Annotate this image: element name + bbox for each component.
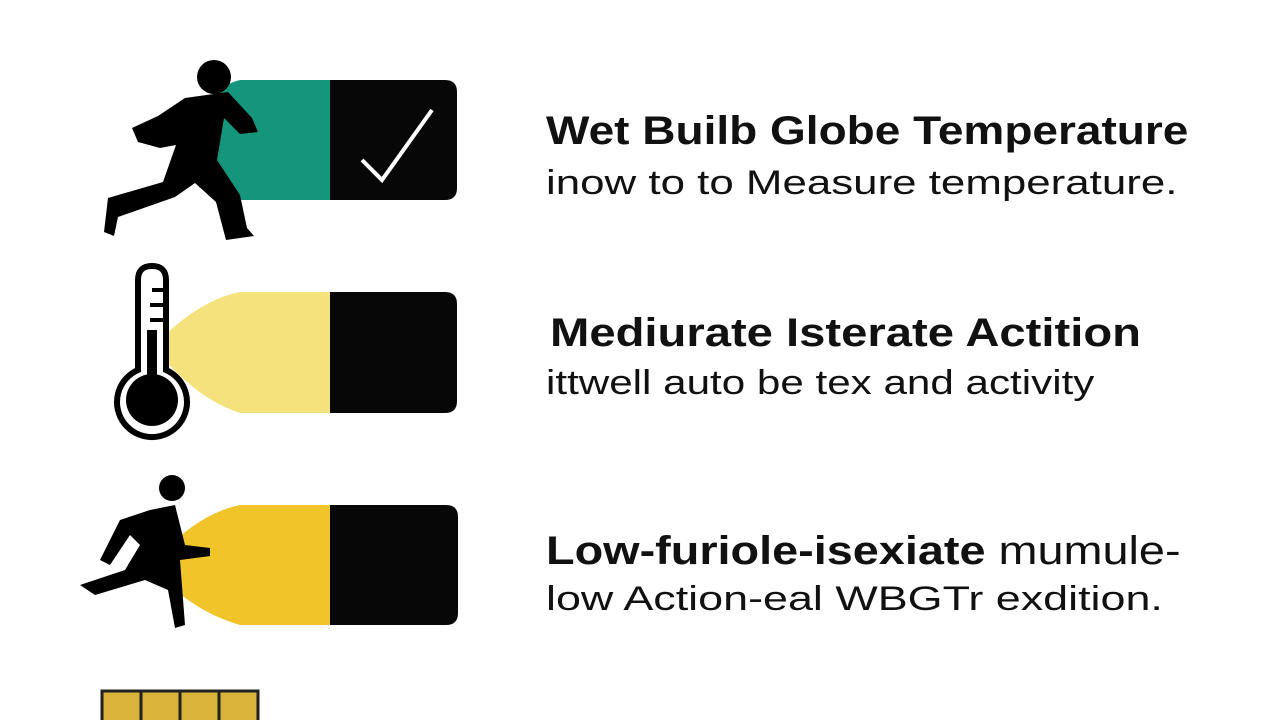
bottom boxes (102, 691, 258, 720)
bar: light yellow (160, 292, 457, 413)
title 2: Mediurate Isterate Actition (550, 311, 1141, 355)
icon: runner 1 (104, 60, 258, 240)
bar: yellow (170, 505, 458, 625)
bar: green teal (180, 80, 457, 200)
row 1 graphic (80, 60, 458, 720)
icon: thermometer (117, 266, 187, 437)
icon: runner 2 (80, 475, 210, 628)
subtitle 3: low Action-eal WBGTr exdition. (546, 580, 1163, 618)
subtitle 1: inow to to Measure temperature. (546, 164, 1177, 202)
title 3: Low-furiole-isexiate mumule- (546, 529, 1181, 573)
title 1: Wet Builb Globe Temperature (546, 109, 1188, 153)
subtitle 2: ittwell auto be tex and activity (546, 364, 1094, 402)
